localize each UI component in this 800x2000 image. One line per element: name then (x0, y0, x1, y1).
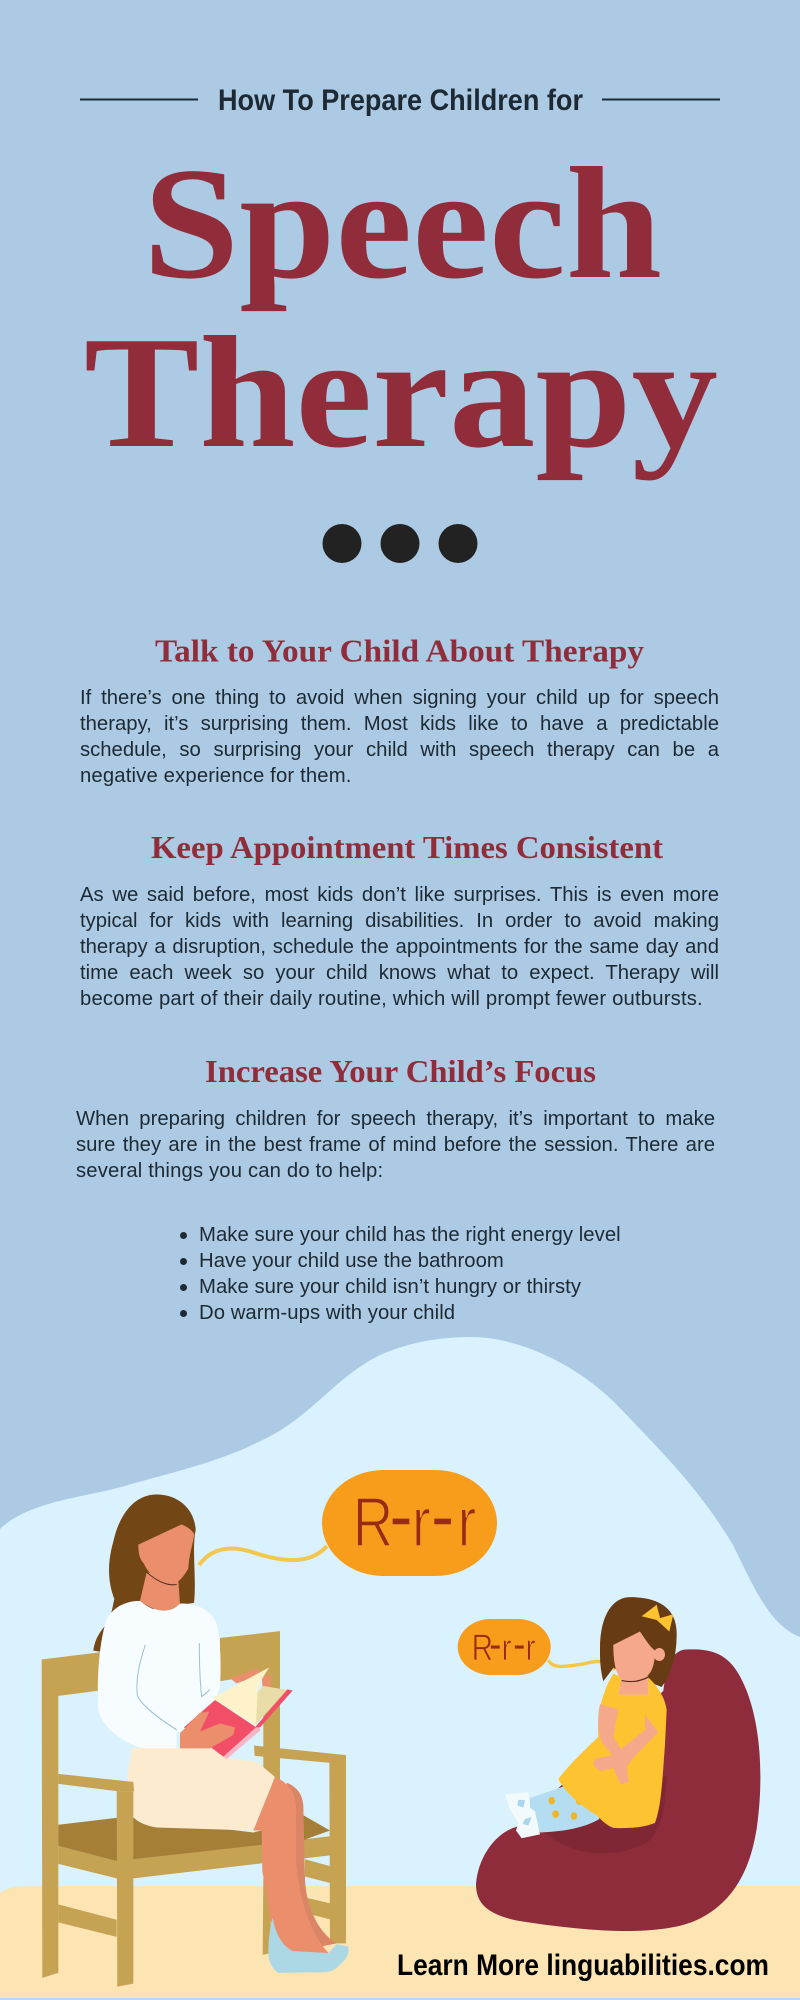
speech bubble: woman: - (389, 1463, 413, 1566)
speech bubble: girl: r (526, 1628, 535, 1669)
chair back and rear parts (42, 1631, 346, 1978)
shoe (268, 1917, 349, 1973)
skirt (127, 1747, 275, 1831)
illustration: woman on chair (42, 1495, 349, 1987)
bullet list: Make sure your child has the right energy level (199, 1224, 621, 1246)
lower hand (180, 1712, 235, 1748)
speech bubble: woman (322, 1463, 497, 1576)
sweater fold lines (137, 1643, 210, 1730)
girl face (613, 1632, 655, 1681)
bullet list: Have your child use the bathroom (199, 1250, 504, 1272)
book right cover (255, 1689, 293, 1727)
heading: increase focus: Increase Your Child’s Focus (205, 1053, 596, 1089)
header rule right (602, 98, 720, 100)
bullet list: Make sure your child isn’t hungry or thirsty (199, 1276, 581, 1298)
hair bow (642, 1605, 673, 1632)
speech bubble: woman: - (430, 1463, 455, 1566)
paragraph: keep appointment times: become part of their daily routine, which will prompt fewer outbursts. (80, 988, 703, 1010)
speech bubble: girl: - (489, 1617, 502, 1671)
speech bubble: woman: r (458, 1484, 476, 1561)
bullet list: Do warm-ups with your child (199, 1302, 455, 1324)
woman sweater (98, 1601, 221, 1749)
woman neck (140, 1572, 180, 1611)
header rule left (80, 98, 198, 100)
kicker heading: How To Prepare Children for (218, 84, 583, 117)
beanbag (476, 1649, 760, 1931)
jaw line (147, 1572, 177, 1585)
book and hands (180, 1667, 293, 1759)
speech bubble: woman: r (412, 1484, 431, 1561)
girl arm right (593, 1715, 658, 1785)
speech bubble: girl: r (502, 1628, 511, 1669)
bullet list (180, 1224, 621, 1324)
paragraph: talk to your child: negative experience for them. (80, 765, 352, 787)
book left cover (184, 1700, 256, 1757)
title line 1: Speech (143, 134, 662, 312)
girl legs (530, 1787, 599, 1832)
woman face (138, 1524, 194, 1585)
paragraph: keep appointment times: As we said before, most kids don’t like surprises. This is even more (80, 884, 719, 906)
paragraph: increase focus (76, 1108, 715, 1182)
floor (0, 1886, 800, 2000)
paragraph: talk to your child: therapy, it’s surprising them. Most kids like to have a predictable (80, 713, 719, 735)
socks (505, 1792, 540, 1838)
background blob (0, 1337, 800, 2000)
heading: talk to your child: Talk to Your Child About Therapy (155, 632, 644, 668)
upper hand (230, 1668, 271, 1695)
paragraph: keep appointment times (80, 884, 719, 1010)
paragraph: increase focus: sure they are in the best frame of mind before the session. There are (76, 1134, 715, 1156)
paragraph: increase focus: several things you can do to help: (76, 1160, 383, 1182)
chair front left (58, 1774, 134, 1987)
woman hair (93, 1495, 196, 1652)
heading: keep appointment times: Keep Appointment Times Consistent (151, 829, 663, 865)
rear leg (287, 1783, 337, 1947)
paragraph: talk to your child: If there’s one thing to avoid when signing your child up for speech (80, 687, 719, 709)
speech bubble: girl (458, 1617, 551, 1675)
speech bubble tail: girl (548, 1660, 615, 1670)
girl dress (558, 1674, 667, 1828)
girl neck line (622, 1676, 649, 1682)
bottom edge strip (0, 1998, 800, 2000)
book edge (223, 1727, 260, 1759)
paragraph: keep appointment times: time each week so your child knows what to expect. Therapy will (80, 962, 719, 984)
girl neck (618, 1676, 648, 1695)
speech bubble tail: woman (199, 1546, 327, 1565)
paragraph: keep appointment times: typical for kids with learning disabilities. In order to avoid making (80, 910, 719, 932)
speech bubble: woman: R (353, 1484, 393, 1561)
three dots (322, 524, 478, 563)
title line 2: Therapy (84, 303, 718, 481)
girl ear (654, 1648, 665, 1661)
paragraph: increase focus: When preparing children for speech therapy, it’s important to make (76, 1108, 715, 1130)
leg bee pattern (548, 1797, 583, 1820)
pages right (256, 1686, 287, 1724)
paragraph: keep appointment times: therapy a disruption, schedule the appointments for the same day and (80, 936, 719, 958)
pages left (213, 1667, 269, 1726)
front leg (253, 1777, 328, 1953)
girl hair (600, 1597, 677, 1687)
paragraph: talk to your child: schedule, so surprising your child with speech therapy can be a (80, 739, 719, 761)
girl arm left (598, 1704, 622, 1758)
speech bubble: girl: - (513, 1617, 526, 1671)
speech bubble: girl: R (472, 1628, 493, 1669)
chair seat (58, 1815, 330, 1861)
illustration: girl on beanbag (476, 1597, 760, 1931)
paragraph: talk to your child (80, 687, 720, 787)
beanbag shadow (543, 1775, 667, 1853)
